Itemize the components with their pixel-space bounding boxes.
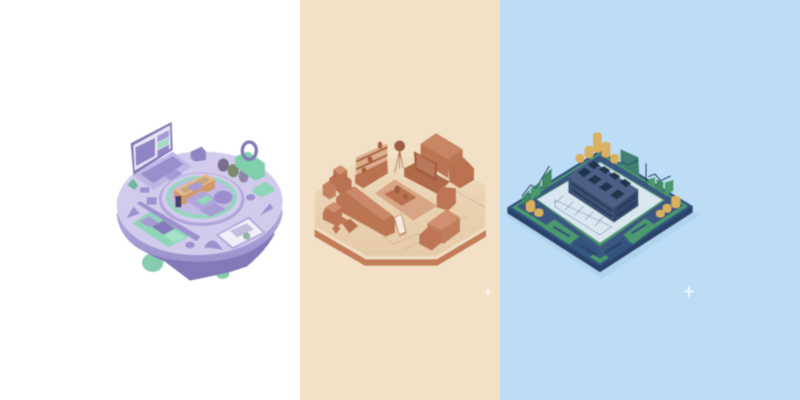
coins right xyxy=(656,196,680,217)
icon: blue sparkle xyxy=(683,284,695,299)
shelf xyxy=(355,142,388,188)
platform side xyxy=(315,220,486,266)
platform side xyxy=(507,206,693,272)
coffee table xyxy=(384,185,417,206)
concentric rings xyxy=(159,173,244,226)
platform top xyxy=(507,150,693,267)
floor lamp xyxy=(394,141,405,173)
road lines xyxy=(370,192,485,250)
chart top right xyxy=(621,149,639,177)
coins left xyxy=(526,200,543,217)
blueprint sheet xyxy=(536,162,665,246)
jars xyxy=(218,158,249,183)
inner navy frame xyxy=(517,155,683,259)
laptop xyxy=(131,122,192,190)
boxes lower left xyxy=(323,202,358,234)
coins top xyxy=(576,133,619,163)
panel: beige background xyxy=(300,0,500,400)
small truck xyxy=(419,209,460,251)
illustration: terracotta octagon platform xyxy=(315,133,486,266)
small parts xyxy=(127,187,273,250)
green feet xyxy=(142,253,229,279)
plant xyxy=(127,178,138,190)
boxes upper left xyxy=(323,165,352,199)
armchair xyxy=(437,187,456,211)
chart right xyxy=(646,163,673,196)
soft shadow xyxy=(507,210,700,278)
illustration: purple round platform xyxy=(115,122,284,281)
platform top xyxy=(115,149,284,258)
large truck and tv xyxy=(404,133,474,194)
green stand with ring xyxy=(235,142,265,181)
chart left xyxy=(522,166,552,204)
platform underside xyxy=(130,233,275,281)
panel: blue background xyxy=(500,0,800,400)
platform rim xyxy=(117,203,283,262)
small purple object xyxy=(191,147,206,162)
center blocks xyxy=(174,174,233,217)
green key panels xyxy=(543,218,657,260)
panel: white background xyxy=(0,0,300,400)
certificate xyxy=(216,217,266,249)
phone xyxy=(393,213,407,237)
platform surface xyxy=(315,155,485,256)
divider bar xyxy=(137,201,201,241)
green border xyxy=(512,153,688,263)
rug xyxy=(375,179,437,221)
building xyxy=(568,159,638,223)
icon: beige sparkle xyxy=(482,285,494,298)
green box right xyxy=(253,182,274,197)
sofa xyxy=(336,187,395,237)
green tabs lower left xyxy=(132,212,190,247)
platform top xyxy=(315,155,486,259)
illustration: navy square platform xyxy=(507,133,700,278)
